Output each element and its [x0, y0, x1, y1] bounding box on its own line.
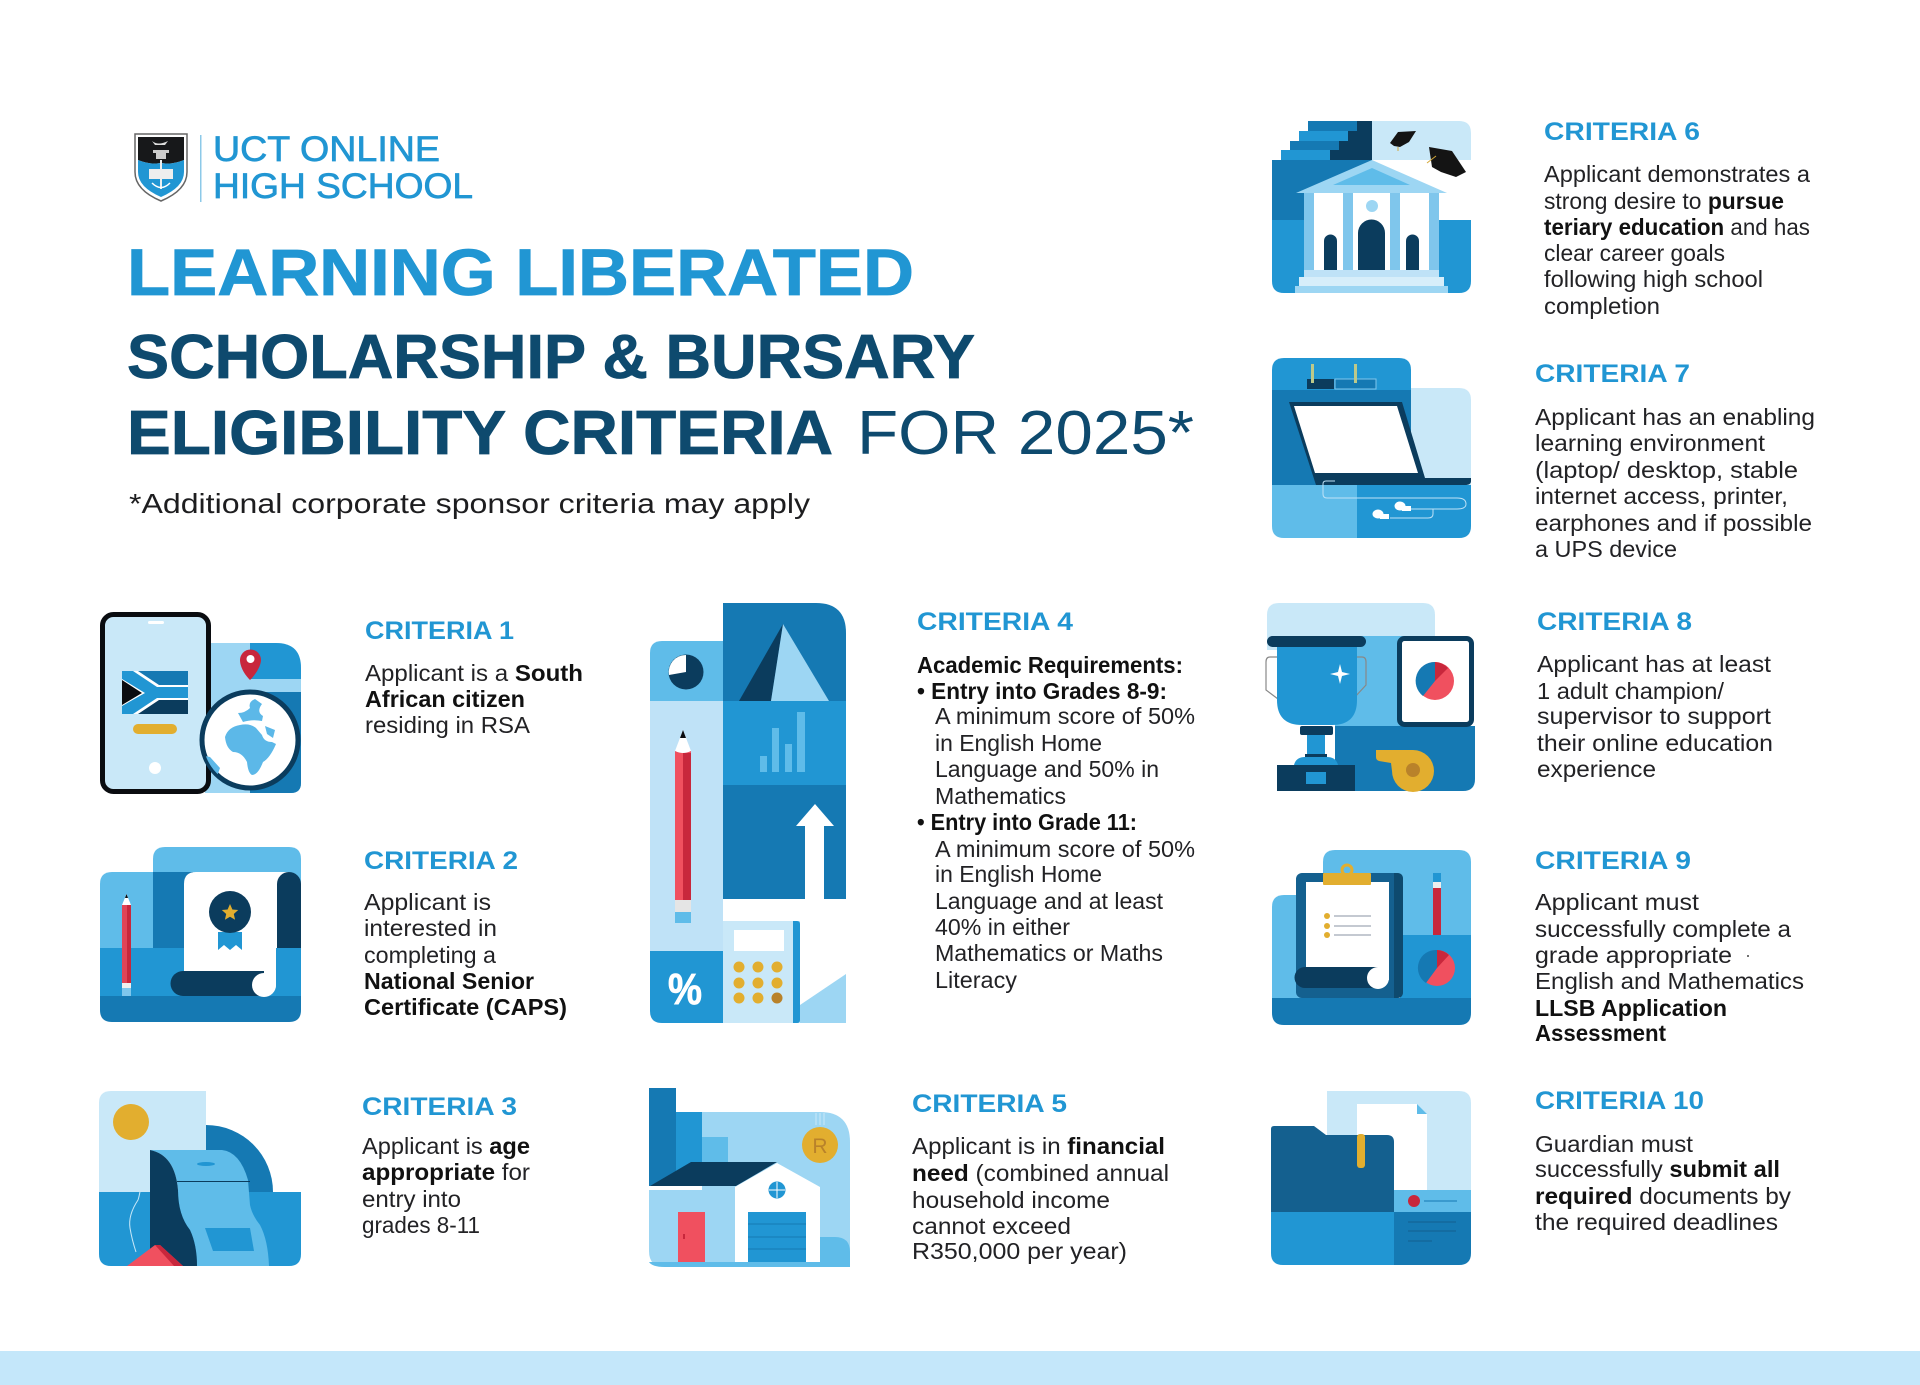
icon: trophy, chart and whistle	[1266, 603, 1475, 792]
heading: criteria 9: CRITERIA 9	[1535, 847, 1691, 875]
text: criteria 8 body: supervisor to support	[1537, 703, 1772, 729]
title: for 2025: FOR 2025*	[857, 399, 1194, 468]
text: criteria 3 body: entry into	[362, 1186, 461, 1212]
panel: criteria 9	[1272, 847, 1804, 1046]
text: criteria 8 body: their online education	[1537, 730, 1773, 756]
heading: criteria 10: CRITERIA 10	[1535, 1087, 1704, 1115]
text: criteria 4 body: Literacy	[935, 967, 1017, 993]
icon: university building and graduation caps	[1272, 121, 1471, 293]
text: criteria 2 body	[364, 889, 567, 1020]
text: criteria 2 body: Certificate (CAPS)	[364, 994, 567, 1020]
text: criteria 4 body: in English Home	[935, 861, 1102, 887]
text: criteria 9 body	[1535, 889, 1804, 1046]
text: criteria 6 body: clear career goals	[1544, 240, 1725, 266]
text: criteria 5 body: R350,000 per year)	[912, 1238, 1127, 1264]
text: criteria 2 body: Applicant is	[364, 889, 491, 915]
text: criteria 4 body: 40% in either	[935, 914, 1070, 940]
text: criteria 2 body: completing a	[364, 942, 496, 968]
icon: house and coin	[649, 1088, 850, 1267]
icon: maths and statistics illustration	[650, 603, 846, 1023]
text: criteria 6 body: Applicant demonstrates a	[1544, 161, 1810, 187]
panel: criteria 2	[100, 847, 567, 1022]
text: criteria 10 body	[1535, 1131, 1792, 1235]
text: criteria 2 body: interested in	[364, 915, 497, 941]
panel: criteria 4	[650, 603, 1195, 1023]
text: criteria 8 body: experience	[1537, 756, 1656, 782]
panel: criteria 10	[1271, 1087, 1792, 1265]
text: criteria 4 body: Academic Requirements:	[917, 652, 1183, 678]
heading: criteria 8: CRITERIA 8	[1537, 608, 1692, 636]
text: criteria 9 body: successfully complete a	[1535, 916, 1791, 942]
icon: UCT shield	[135, 134, 187, 201]
panel: criteria 7	[1272, 358, 1815, 562]
icon: house and coin: R	[812, 1135, 828, 1158]
subtitle note: *Additional corporate sponsor criteria may apply	[129, 488, 810, 519]
icon: phone, flag and globe	[102, 614, 301, 793]
logo text: HIGH SCHOOL	[213, 167, 473, 206]
text: criteria 8 body: 1 adult champion/	[1537, 678, 1725, 704]
text: criteria 10 body: required documents by	[1535, 1183, 1792, 1209]
text: criteria 9 body: Assessment	[1535, 1020, 1666, 1046]
text: criteria 6 body: teriary education and has	[1544, 214, 1810, 240]
title: Learning Liberated: LEARNING LIBERATED	[127, 235, 914, 309]
text: criteria 4 body: in English Home	[935, 730, 1102, 756]
text: criteria 8 body: Applicant has at least	[1537, 651, 1772, 677]
text: criteria 4 body: Language and at least	[935, 888, 1164, 914]
text: criteria 3 body: Applicant is age	[362, 1133, 530, 1159]
panel: criteria 1	[102, 614, 583, 793]
text: criteria 6 body: completion	[1544, 293, 1660, 319]
icon: sun, winding road and landscape	[99, 1091, 301, 1266]
text: criteria 2 body: National Senior	[364, 968, 534, 994]
text: criteria 3 body	[362, 1133, 530, 1238]
text: criteria 6 body: following high school	[1544, 266, 1763, 292]
text: criteria 5 body: household income	[912, 1187, 1110, 1213]
icon: folder and documents	[1271, 1091, 1471, 1265]
title block	[127, 235, 1194, 519]
text: criteria 10 body: successfully submit all	[1535, 1156, 1780, 1182]
text: criteria 7 body: a UPS device	[1535, 536, 1677, 562]
text: criteria 6 body	[1544, 161, 1810, 319]
text: criteria 5 body: need (combined annual	[912, 1160, 1169, 1186]
text: criteria 1 body: African citizen	[365, 686, 525, 712]
text: criteria 4 body: • Entry into Grades 8-9:	[917, 678, 1167, 704]
text: criteria 7 body: earphones and if possible	[1535, 510, 1812, 536]
text: criteria 7 body: (laptop/ desktop, stable	[1535, 457, 1798, 483]
text: criteria 1 body: Applicant is a South	[365, 660, 583, 686]
text: criteria 1 body	[365, 660, 583, 738]
text: criteria 8 body	[1537, 651, 1773, 782]
text: criteria 9 body: Applicant must	[1535, 889, 1700, 915]
heading: criteria 2: CRITERIA 2	[364, 847, 518, 875]
panel: criteria 8	[1266, 603, 1773, 792]
panel: criteria 6	[1272, 118, 1810, 319]
text: criteria 4 body: Language and 50% in	[935, 756, 1159, 782]
text: criteria 1 body: residing in RSA	[365, 712, 531, 738]
text: criteria 4 body: Mathematics	[935, 783, 1066, 809]
footer band	[0, 1351, 1920, 1385]
icon: laptop, router and earphones	[1272, 358, 1471, 538]
text: criteria 7 body: learning environment	[1535, 430, 1766, 456]
text: criteria 3 body: appropriate for	[362, 1159, 530, 1185]
panel: criteria 3	[99, 1091, 530, 1266]
text: criteria 4 body: Mathematics or Maths	[935, 940, 1163, 966]
text: criteria 6 body: strong desire to pursue	[1544, 188, 1784, 214]
text: criteria 4 body: A minimum score of 50%	[935, 836, 1195, 862]
heading: criteria 1: CRITERIA 1	[365, 617, 514, 645]
logo text	[213, 130, 473, 206]
title: Eligibility Criteria: ELIGIBILITY CRITERIA	[127, 399, 833, 468]
text: criteria 9 body: LLSB Application	[1535, 995, 1727, 1021]
logo text: UCT ONLINE	[213, 130, 440, 169]
text: criteria 10 body: Guardian must	[1535, 1131, 1694, 1157]
text: criteria 5 body	[912, 1133, 1169, 1264]
title: Scholarship and Bursary: SCHOLARSHIP & BURSARY	[127, 323, 975, 392]
text: criteria 4 body	[917, 652, 1195, 993]
text: criteria 3 body: grades 8-11	[362, 1212, 480, 1238]
text: criteria 7 body: Applicant has an enabling	[1535, 404, 1815, 430]
heading: criteria 4: CRITERIA 4	[917, 608, 1073, 636]
text: criteria 9 body: English and Mathematics	[1535, 968, 1804, 994]
text: criteria 4 body: • Entry into Grade 11:	[917, 809, 1137, 835]
text: criteria 7 body	[1535, 404, 1815, 562]
panel: criteria 5	[649, 1088, 1169, 1267]
text: criteria 5 body: Applicant is in financial	[912, 1133, 1165, 1159]
text: criteria 5 body: cannot exceed	[912, 1213, 1071, 1239]
icon: maths and statistics illustration: %	[668, 965, 702, 1014]
heading: criteria 5: CRITERIA 5	[912, 1090, 1067, 1118]
icon: certificate scroll and pencil	[100, 847, 301, 1022]
icon: clipboard, pencil and pie chart	[1272, 850, 1471, 1025]
heading: criteria 3: CRITERIA 3	[362, 1093, 517, 1121]
text: criteria 7 body: internet access, printer,	[1535, 483, 1788, 509]
text: criteria 10 body: the required deadlines	[1535, 1209, 1778, 1235]
text: criteria 4 body: A minimum score of 50%	[935, 703, 1195, 729]
logo: UCT Online High School	[135, 130, 473, 206]
text: criteria 9 body: grade appropriate	[1535, 942, 1732, 968]
heading: criteria 7: CRITERIA 7	[1535, 360, 1690, 388]
heading: criteria 6: CRITERIA 6	[1544, 118, 1700, 146]
